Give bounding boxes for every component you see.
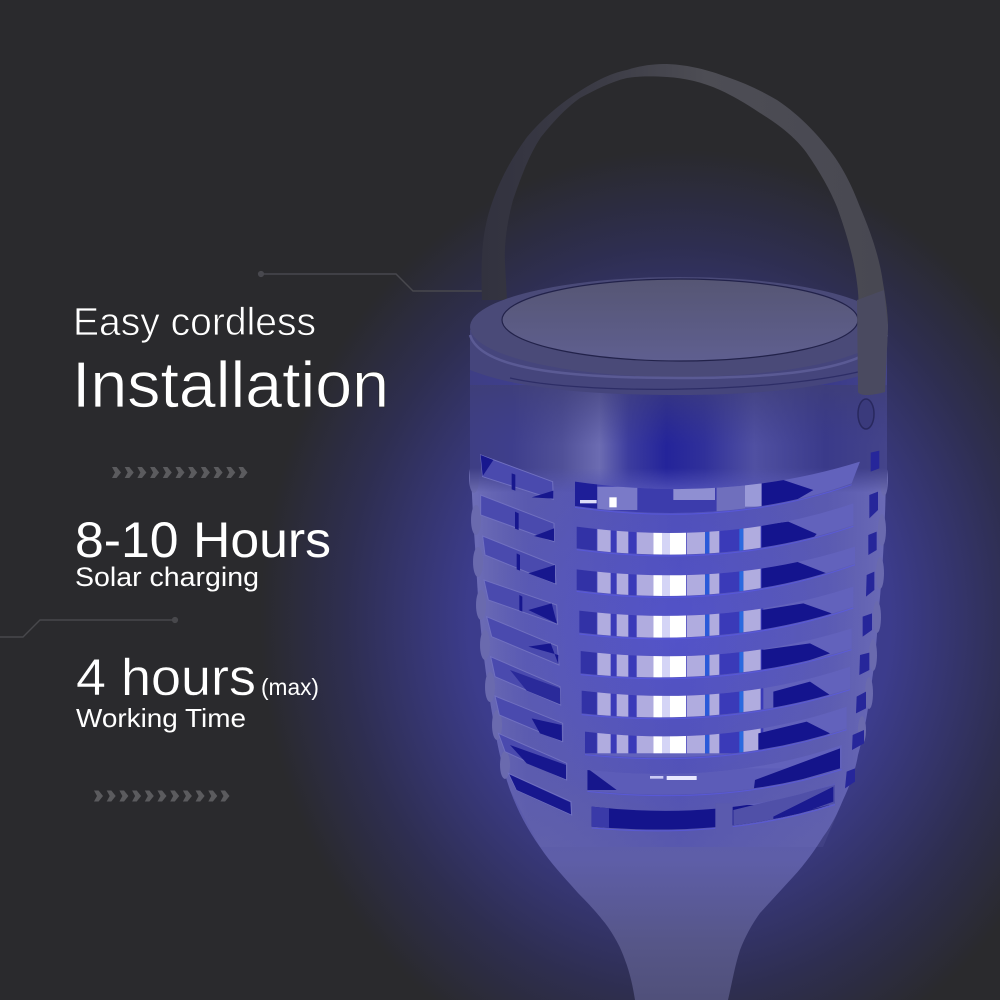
bottom row divider [715,803,733,833]
cap lid side band [470,330,887,395]
handle button [858,399,874,429]
heading: Easy cordless Installation [72,301,389,421]
stat: 4 hours (max) Working Time: (max) [261,674,319,700]
left slot dark interior [481,455,571,814]
right side slots [845,451,879,788]
chevrons: lower [94,790,230,802]
stat: 4 hours (max) Working Time [76,649,319,733]
stat: 8-10 Hours Solar charging [75,512,331,592]
solar panel disc [502,279,858,361]
cap lid [470,277,888,377]
lamp cage and stem [465,430,888,1000]
connector line: top [259,272,482,291]
stat: 4 hours (max) Working Time: Working Time [76,703,246,733]
handle lower strap over cap [857,290,888,395]
stat: 4 hours (max) Working Time: 4 hours [76,649,256,707]
lower rows interior [585,768,842,800]
product: solar insect killer lamp [465,64,888,1000]
heading: Easy cordless Installation: Easy cordless [73,301,316,344]
stat: 8-10 Hours Solar charging: Solar charging [75,562,259,592]
top row interior [575,482,598,509]
scalloped band edges [469,463,888,779]
cage window slots [481,451,879,843]
stat: 8-10 Hours Solar charging: 8-10 Hours [75,512,331,568]
left window slots [481,455,572,815]
lamp cap cylinder [470,277,888,495]
dark reflections, right side [758,522,832,752]
lamp handle [481,64,888,392]
heading: Easy cordless Installation: Installation [72,348,389,421]
centre window slots with glowing UV tube [573,457,867,843]
connector line: bottom [0,618,177,637]
chevrons: upper [112,467,248,478]
band highlights [575,485,855,831]
